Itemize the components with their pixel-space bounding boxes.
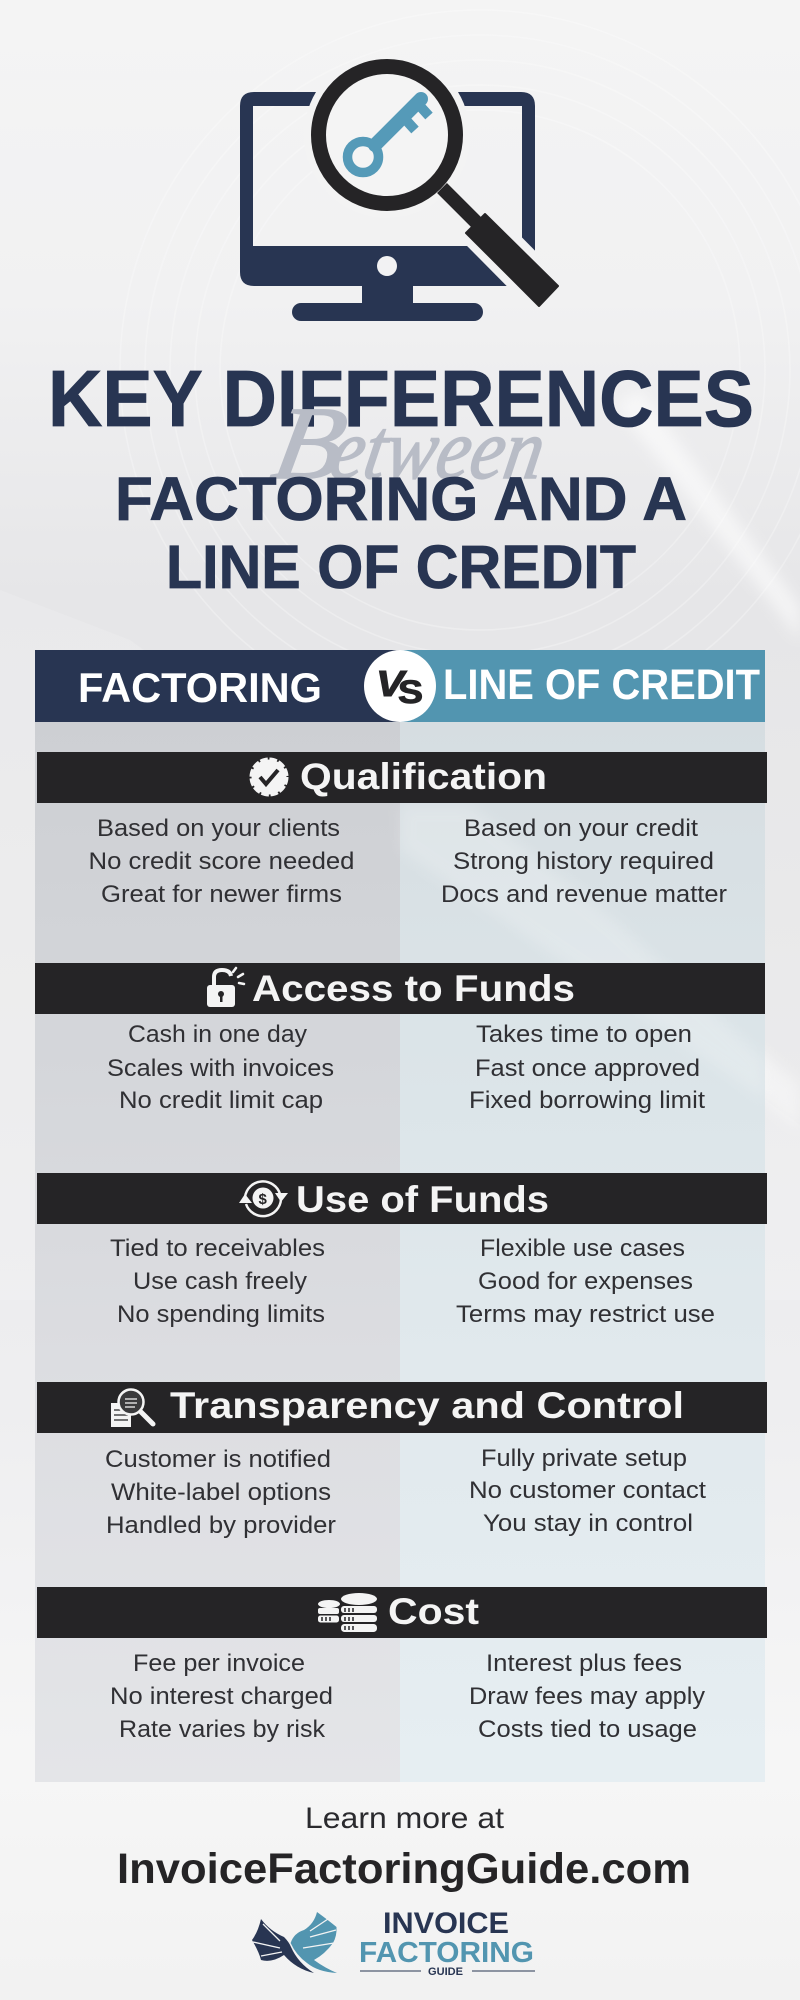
section: transparency and control <box>37 1382 767 1539</box>
vs badge <box>364 650 436 722</box>
heading: cost <box>37 1587 767 1638</box>
text: line of credit use: Flexible use cases <box>480 1235 685 1262</box>
icon: monitor with magnifying glass and key <box>240 52 570 321</box>
text: factoring transparency <box>105 1446 336 1539</box>
title <box>48 354 754 601</box>
heading: transparency and control: Transparency and Control <box>170 1385 684 1426</box>
text: line of credit transparency: No customer contact <box>469 1477 706 1504</box>
heading: use of funds: $ <box>258 1191 268 1208</box>
text: line of credit transparency: Fully private setup <box>481 1445 687 1472</box>
heading: qualification <box>37 752 767 803</box>
text: factoring transparency: White-label options <box>111 1479 331 1506</box>
text: factoring use: No spending limits <box>117 1301 325 1328</box>
text: factoring cost: Fee per invoice <box>133 1650 305 1677</box>
section: qualification <box>37 752 767 908</box>
text: line of credit qualification: Docs and revenue matter <box>441 881 727 908</box>
text: line of credit cost: Interest plus fees <box>486 1650 682 1677</box>
logo text <box>359 1907 535 1978</box>
text: line of credit use: Terms may restrict use <box>456 1301 715 1328</box>
text: factoring use: Use cash freely <box>133 1268 308 1295</box>
section: use of funds <box>37 1173 767 1328</box>
text: line of credit cost <box>469 1650 706 1743</box>
icon: wings <box>252 1912 337 1973</box>
logo text: FACTORING <box>359 1937 534 1969</box>
text: line of credit qualification <box>441 815 727 908</box>
text: line of credit transparency: You stay in control <box>483 1510 693 1537</box>
heading: use of funds <box>37 1173 767 1224</box>
text: line of credit access <box>469 1021 705 1114</box>
footer call to action <box>117 1802 691 1893</box>
text: line of credit qualification: Based on your credit <box>464 815 698 842</box>
heading: use of funds: Use of Funds <box>296 1179 549 1220</box>
heading: access to funds <box>35 963 765 1014</box>
text: factoring access: Cash in one day <box>128 1021 308 1048</box>
section: cost <box>37 1587 767 1743</box>
text: factoring use <box>110 1235 325 1328</box>
header: factoring <box>35 650 400 722</box>
header: line of credit <box>400 650 765 722</box>
logo text: GUIDE <box>428 1966 463 1978</box>
icon: key <box>348 99 429 172</box>
text: factoring cost: Rate varies by risk <box>119 1716 326 1743</box>
text: line of credit use: Good for expenses <box>478 1268 693 1295</box>
text: factoring cost: No interest charged <box>110 1683 333 1710</box>
text: factoring use: Tied to receivables <box>110 1235 325 1262</box>
text: factoring access: No credit limit cap <box>119 1087 323 1114</box>
title line 2: FACTORING AND A <box>115 465 687 533</box>
heading: cost: Cost <box>388 1591 479 1632</box>
script word: Between: etween <box>324 402 552 497</box>
text: line of credit cost: Costs tied to usage <box>478 1716 697 1743</box>
icon: magnifier <box>318 66 558 306</box>
text: line of credit transparency <box>469 1445 706 1537</box>
section: access to funds <box>35 963 765 1114</box>
header: factoring: FACTORING <box>78 664 322 711</box>
text: learn more: Learn more at <box>305 1802 505 1835</box>
title line 1: KEY DIFFERENCES <box>48 354 754 443</box>
text: line of credit cost: Draw fees may apply <box>469 1683 706 1710</box>
text: factoring access <box>107 1021 334 1114</box>
logo: invoice factoring guide <box>252 1907 535 1978</box>
icon: monitor <box>240 92 535 321</box>
heading: transparency and control <box>37 1382 767 1433</box>
header band <box>35 650 765 722</box>
text: line of credit qualification: Strong history required <box>453 848 714 875</box>
comparison table background <box>35 722 765 1782</box>
text: line of credit access: Takes time to open <box>476 1021 692 1048</box>
text: website: InvoiceFactoringGuide.com <box>117 1845 691 1893</box>
text: factoring qualification <box>88 815 354 908</box>
script word: Between <box>265 386 552 501</box>
logo text: INVOICE <box>383 1907 509 1940</box>
script word: Between: B <box>265 386 355 501</box>
vs badge: V <box>376 663 407 704</box>
text: line of credit use <box>456 1235 715 1328</box>
heading: access to funds: Access to Funds <box>252 968 575 1009</box>
text: factoring qualification: No credit score needed <box>88 848 354 875</box>
text: factoring qualification: Based on your clients <box>97 815 340 842</box>
heading: qualification: Qualification <box>300 756 547 797</box>
text: factoring access: Scales with invoices <box>107 1055 334 1082</box>
text: factoring qualification: Great for newer firms <box>101 881 342 908</box>
text: factoring transparency: Customer is notified <box>105 1446 331 1473</box>
text: factoring cost <box>110 1650 333 1743</box>
text: line of credit access: Fast once approved <box>475 1055 700 1082</box>
header: line of credit: LINE OF CREDIT <box>443 661 760 709</box>
text: factoring transparency: Handled by provider <box>106 1512 336 1539</box>
text: line of credit access: Fixed borrowing limit <box>469 1087 705 1114</box>
title line 3: LINE OF CREDIT <box>166 533 636 601</box>
vs badge: S <box>398 674 423 710</box>
